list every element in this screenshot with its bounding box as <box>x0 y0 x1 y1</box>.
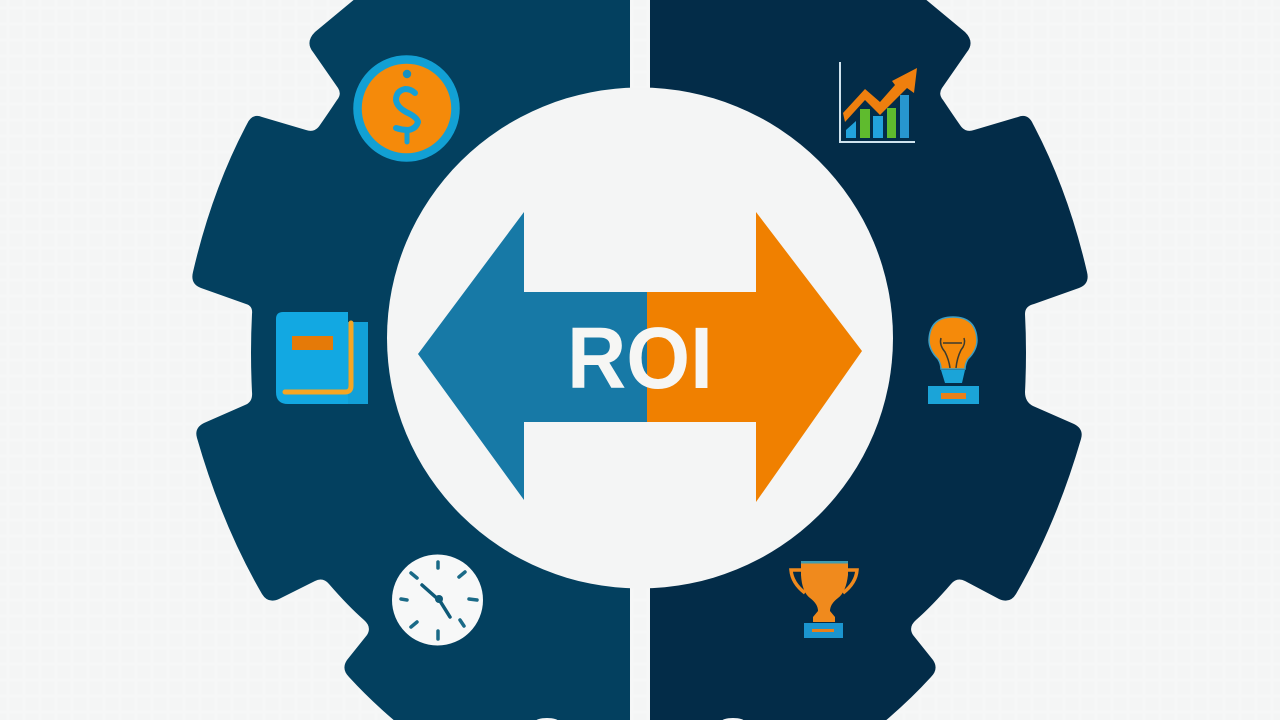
center circle <box>387 88 893 588</box>
ROI label: ROI <box>567 310 713 407</box>
icon: growth chart <box>840 62 917 142</box>
icon: dollar coin <box>358 60 456 158</box>
gear: left half <box>192 0 630 720</box>
bottom notch marks <box>535 718 745 720</box>
double arrow <box>418 212 862 502</box>
icon: trophy <box>791 561 857 638</box>
icon: book <box>276 312 368 404</box>
gear: right half <box>650 0 1088 720</box>
icon: light bulb <box>928 317 979 404</box>
arrow: investment (left, blue) <box>418 212 647 500</box>
icon: clock <box>392 554 483 646</box>
arrow: return (right, orange) <box>647 212 862 502</box>
